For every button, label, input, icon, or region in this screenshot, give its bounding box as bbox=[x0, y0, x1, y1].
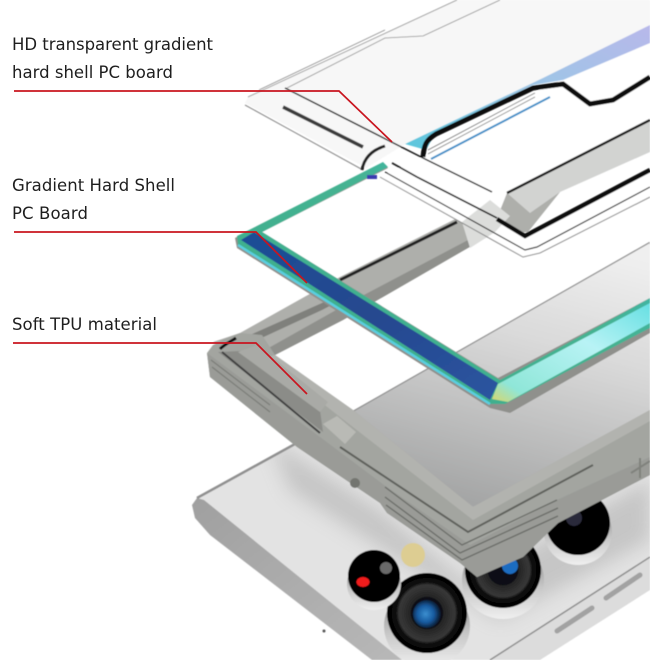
label text bbox=[12, 176, 175, 223]
TPU corner black rim bbox=[220, 338, 236, 349]
phone body bbox=[192, 243, 650, 660]
frame blue band bbox=[241, 232, 498, 400]
board outer lower edge bbox=[245, 105, 650, 257]
frame grey outer edge bbox=[235, 163, 650, 413]
illustration: exploded phone case bbox=[192, 0, 650, 660]
phone side band bbox=[192, 498, 402, 660]
phone back surface bbox=[200, 446, 650, 660]
label text: hard shell PC board bbox=[12, 63, 173, 82]
leader line bbox=[14, 91, 392, 142]
board notch area bbox=[380, 43, 650, 257]
board hinge slot bbox=[362, 146, 385, 170]
camera: far lens bbox=[544, 500, 612, 566]
phone surface shadow bbox=[270, 440, 650, 620]
board top outlines bbox=[248, 0, 500, 97]
board notch black line bbox=[423, 77, 650, 157]
TPU lower frame side bbox=[207, 333, 650, 577]
frame cyan lower line bbox=[238, 245, 490, 404]
board inner lower edge bbox=[385, 172, 650, 250]
board strip black upper line bbox=[507, 120, 650, 193]
TPU upper strip bbox=[213, 192, 560, 360]
phone upper edge bbox=[197, 243, 650, 498]
leader line bbox=[13, 343, 307, 394]
camera: middle lens bbox=[462, 546, 544, 619]
board diagonal black line bbox=[285, 88, 492, 192]
callout: HD transparent gradient hard shell PC board bbox=[12, 35, 392, 142]
board iridescent band bbox=[405, 25, 650, 150]
TPU pad light lane bbox=[238, 351, 326, 412]
frame cyan right band bbox=[492, 303, 650, 402]
gradient hard shell PC frame bbox=[235, 162, 650, 413]
board top surface bbox=[245, 0, 650, 168]
board blue chip bbox=[367, 175, 377, 179]
TPU silver window bbox=[353, 243, 650, 507]
TPU pad lane bbox=[218, 351, 323, 432]
camera module bbox=[347, 491, 612, 660]
board dark strip bbox=[283, 107, 363, 147]
HD transparent board bbox=[245, 0, 650, 257]
phone side buttons bbox=[557, 575, 640, 631]
leader line bbox=[14, 232, 307, 283]
callout: soft TPU material bbox=[12, 315, 307, 394]
TPU outer face shade bbox=[207, 353, 650, 577]
label text: Gradient Hard Shell bbox=[12, 176, 175, 195]
label text: PC Board bbox=[12, 204, 88, 223]
phone side groove bbox=[490, 557, 650, 660]
TPU groove dark line bbox=[222, 352, 320, 433]
board lower black frame bbox=[497, 170, 650, 236]
TPU corner ridges bbox=[385, 487, 558, 560]
TPU side slot bbox=[340, 447, 593, 532]
phone lower side panel bbox=[490, 557, 650, 660]
TPU side tab bbox=[323, 416, 356, 444]
board iridescent lower line bbox=[431, 97, 550, 159]
TPU camera hole bbox=[350, 478, 360, 488]
camera: big lens bbox=[384, 573, 470, 660]
TPU case bbox=[207, 192, 650, 577]
board TPU strip seen through bbox=[483, 120, 650, 213]
board notch inner lines bbox=[428, 93, 535, 154]
label text: HD transparent gradient bbox=[12, 35, 214, 54]
phone microphone hole bbox=[322, 630, 326, 632]
label text bbox=[12, 35, 214, 82]
camera: flash bbox=[401, 543, 425, 567]
camera: sensor with red dot bbox=[347, 550, 401, 610]
TPU plus key bbox=[631, 458, 650, 478]
board strip seen through lower bbox=[462, 200, 510, 248]
TPU strip slot bbox=[252, 302, 329, 338]
label text: Soft TPU material bbox=[12, 315, 157, 334]
frame green edge bbox=[237, 162, 650, 404]
board lower-left black segment bbox=[392, 163, 497, 218]
TPU inner ledge bbox=[265, 355, 650, 520]
callout: gradient hard shell PC board bbox=[12, 176, 307, 283]
TPU strip top dark line bbox=[340, 222, 457, 280]
TPU strip ribbed lane bbox=[270, 240, 470, 355]
TPU left ridges bbox=[211, 360, 270, 412]
